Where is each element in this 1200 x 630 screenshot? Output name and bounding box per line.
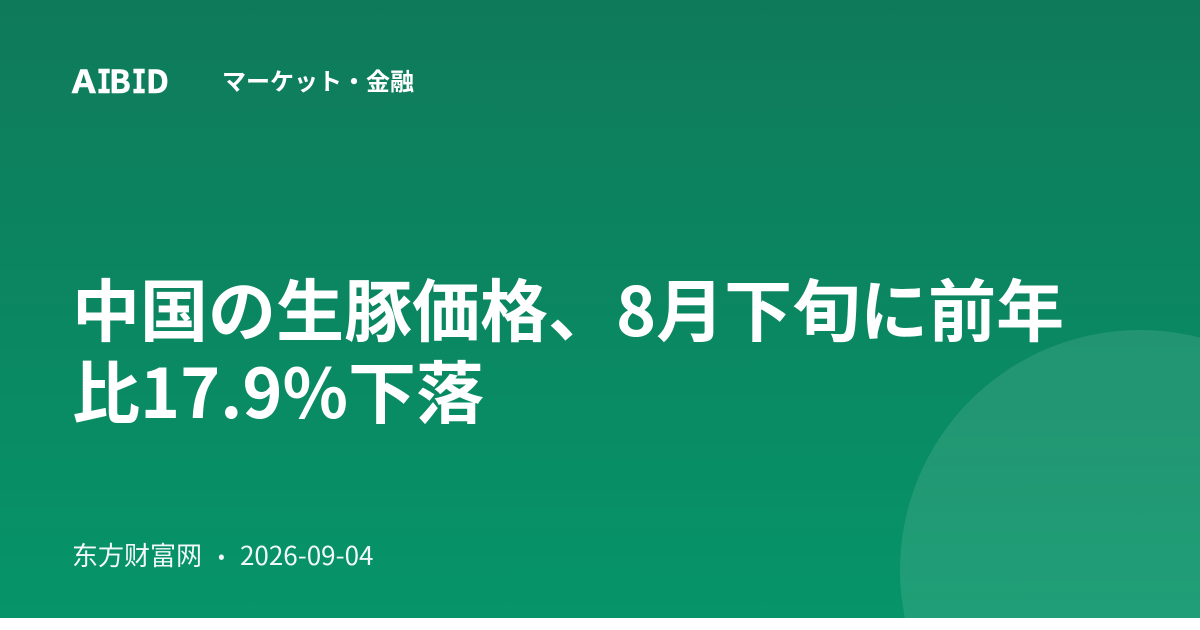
category label: マーケット・金融 xyxy=(222,62,414,97)
source and date: · xyxy=(218,540,225,569)
brand logo text: I xyxy=(97,57,110,103)
brand logo text: B xyxy=(109,57,131,103)
source and date: 2026-09-04 xyxy=(240,536,373,573)
brand logo text: D xyxy=(146,57,169,103)
source and date: 东方财富网 xyxy=(72,536,202,573)
brand logo text: I xyxy=(132,57,145,103)
brand logo text: A xyxy=(72,57,96,103)
source and date xyxy=(72,536,373,573)
brand logo text xyxy=(72,57,169,103)
title: 中国の生豚価格、8月下旬に前年比17.9%下落 xyxy=(72,257,1064,438)
decorative circle xyxy=(900,330,1200,618)
